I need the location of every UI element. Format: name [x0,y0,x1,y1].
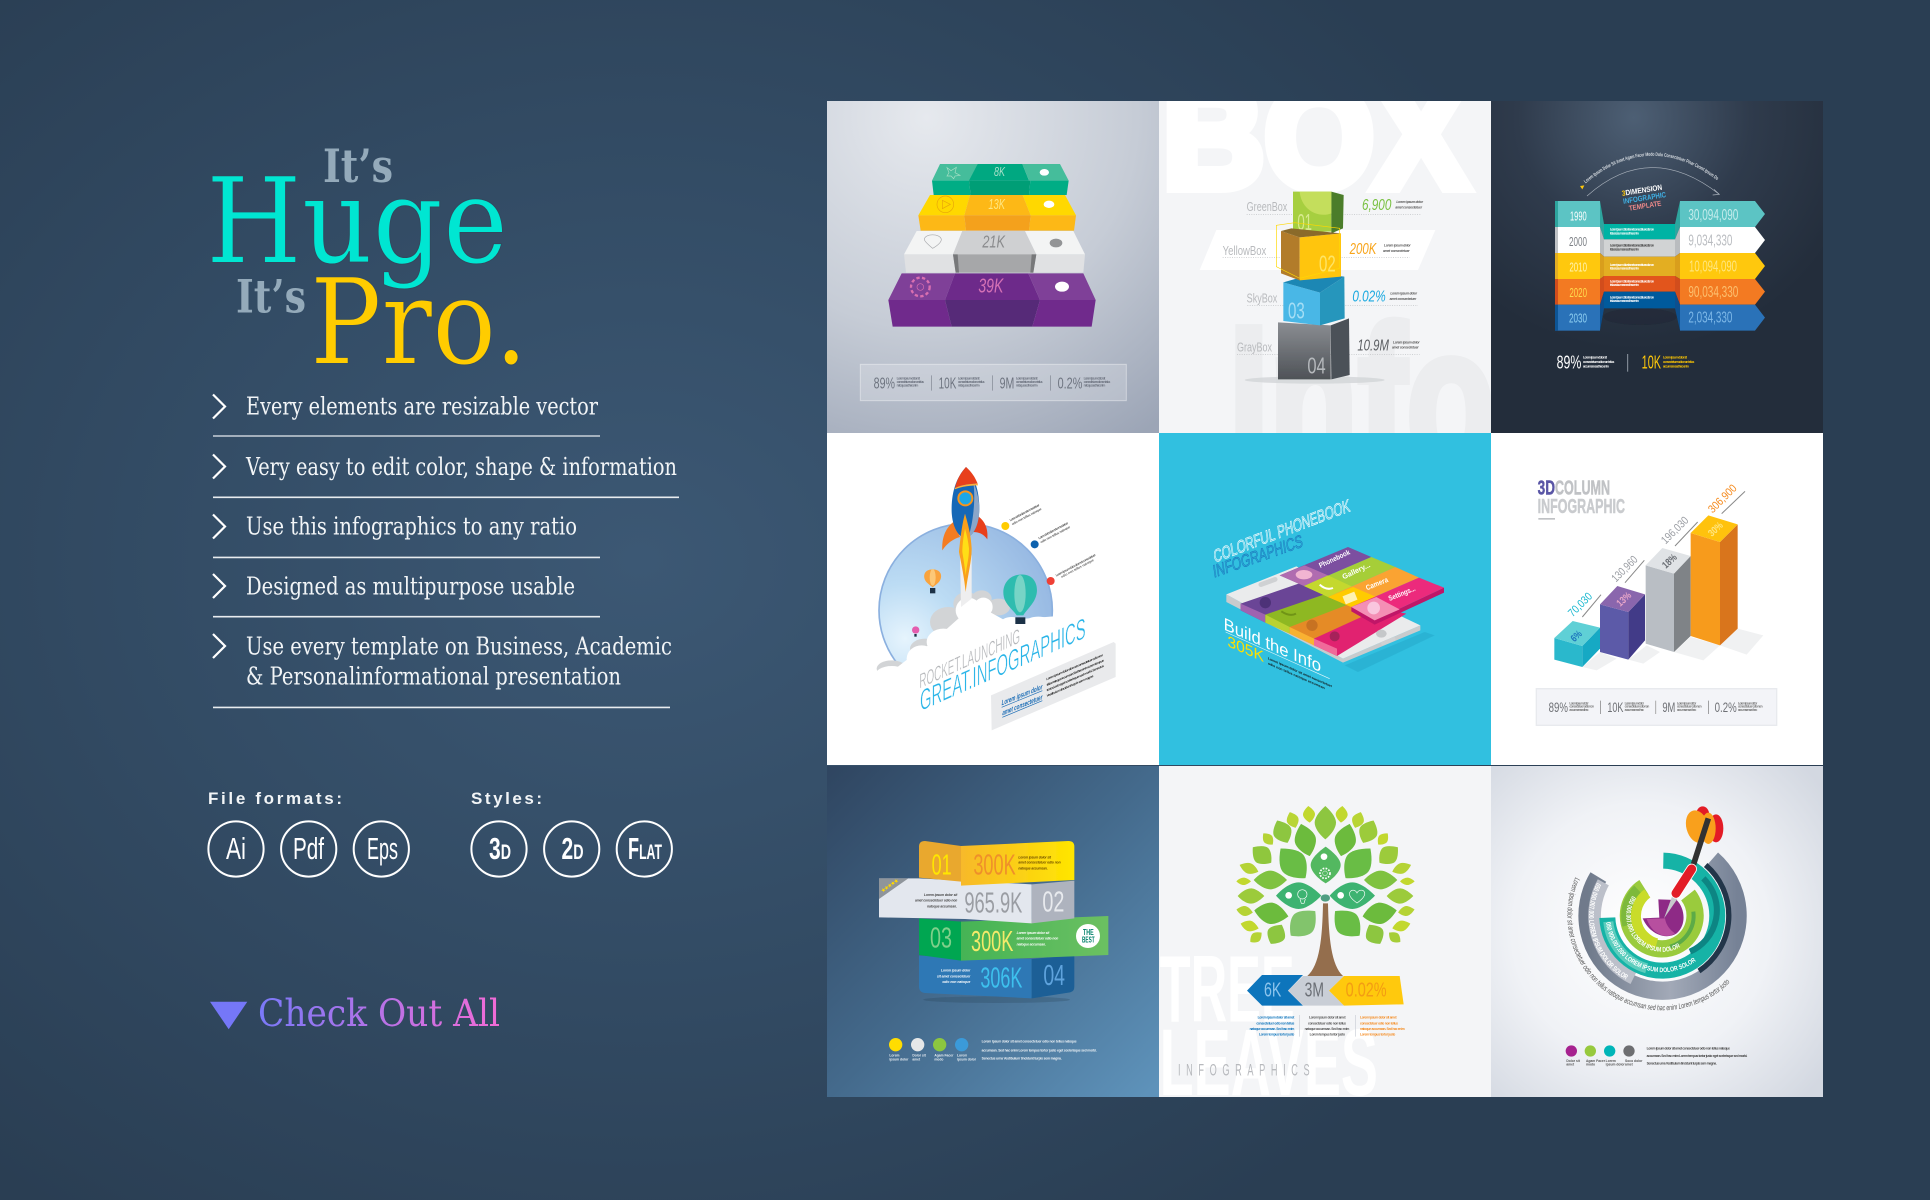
legend dots: modo [934,1058,943,1062]
legend dots: Dolor sit [912,1054,927,1058]
legend dots: Lorem [957,1054,967,1058]
badge: Ai [208,821,264,877]
stats bar: consectetuer odio non [1569,705,1594,709]
title arc: Lorem Ipsum Dolor Sit Amet Agam Facer Modo Dolo Consectetuer Pinar Ceomt Ipsum Dolor [1584,152,1718,184]
green box: 01 [1297,209,1312,235]
center title: INFOGRAPHIC [1622,190,1667,206]
list item 5: & Personalinformational presentation [246,662,621,690]
ribbon 01: 300K [973,849,1016,881]
legend dots: ipsum dolor [889,1058,909,1062]
box values: amet consectetuer [1395,205,1423,209]
box values: amet consectetuer [1390,297,1417,301]
yellow step [918,195,1076,231]
year column: 2020 [1569,286,1587,300]
list item 4: Designed as multipurpose usable [246,572,575,600]
ring: outer gray: 050 000.007.000 LOREM IPSUM DOLOR SOLOR [1589,883,1628,980]
white band [1200,230,1435,270]
list item 4 [213,572,600,617]
center strip: tellus accumsan sed hac enim [1610,247,1639,251]
captions: Lorem tempus tortor justo [1310,1033,1345,1037]
floating menu layer: Gallery... [1341,560,1372,581]
footer stats: accumsan sed hac enim [1583,364,1609,368]
shadow [1603,308,1677,325]
legend text [982,1040,1097,1061]
box values: Lorem ipsum dolor [1393,340,1420,344]
legend text: Senectus urna Vestibulum tincidunt turpis sem magna. [982,1057,1062,1061]
legend dots: amet [1625,1062,1634,1066]
badge: 2D: 2D [562,831,584,866]
box values: 6,900 [1362,197,1392,214]
captions: consectetuer odio non tellus [1308,1021,1346,1025]
stats bar: 89% [874,375,895,392]
yellow box: 02 [1319,251,1336,277]
box values: Lorem ipsum dolor [1390,292,1418,296]
phone shadow [1345,632,1435,672]
ribbon 01: natoque accumsan. [1018,867,1048,871]
ribbon 03: Lorem ipsum dolor sit [1017,931,1050,935]
feature leaves [1276,847,1375,909]
list item 1 [213,393,600,436]
captions: Lorem tempus tortor justo [1360,1033,1395,1037]
panel: rocket launching infographic [827,433,1159,765]
stats bar [1536,689,1777,725]
stats bar: consectetuer odio non tellus [1016,380,1043,384]
stats bar: Lorem ipsum dolor sit [897,376,921,380]
headline: build the info: Build the Info [1224,614,1321,676]
backdrop word: BOX: BOX [1163,55,1468,219]
white step: 21K [982,232,1006,252]
ribbon 01: amet consectetuer odio non [1018,861,1061,865]
center strip: tellus accumsan sed hac enim [1610,267,1639,271]
callout texts: Lorem dolor sit amet consectetuer [1038,521,1070,540]
ring: teal: 050 000.007.000 LOREM IPSUM DOLOR SOLOR [1606,922,1696,972]
legend text [1647,1046,1747,1065]
arrow labels: 0.02% [1346,979,1387,1002]
ribbon 02: amet consectetuer odio non [915,899,957,903]
styles [471,789,672,877]
callout texts: Lorem dolor sit amet consectetuer [1009,503,1041,522]
heading word: Huge: Huge [206,153,508,291]
year column: 1990 [1570,210,1587,224]
gray clouds [877,590,1010,677]
box values: amet consectetuer [1392,346,1419,350]
stats bar: consectetuer odio non tellus [1084,380,1110,384]
panel: tree leaves infographic [1159,766,1491,1116]
headline: build the info: 305K [1227,633,1264,666]
stats bar: natoque sed hac enim [897,384,918,388]
panel: rocket launching infographic: ROCKET.LAUNCHING [919,623,1020,693]
ribbon 03: THE [1083,927,1094,937]
rocket [942,467,988,607]
list item 1: Every elements are resizable vector [246,393,598,421]
stats bar: consectetuer odio non tellus [897,380,924,384]
column 3: gray [1646,548,1691,652]
list item 5 [213,633,672,707]
title: colorful phonebook: COLORFUL PHONEBOOK [1212,496,1351,567]
ribbon 04: sit amet consectetuer [937,974,971,978]
ribbon 03: 300K [971,926,1013,958]
box labels: GrayBox [1237,341,1272,355]
badge: Ai: Ai [226,831,246,866]
legend text: accumsan. Sed hac enim Lorem tempus tortor justo eget scelerisque sed morbi. [982,1048,1097,1052]
yellow step: 13K [988,197,1006,213]
callout texts: odio non tellus natoque [1040,525,1071,544]
ribbon 02: 965.9K [964,888,1022,920]
captions: Lorem ipsum dolor sit amet [1258,1015,1295,1019]
white step [904,231,1085,273]
legend dots [889,1038,977,1062]
footer stats: accumsan sed hac enim [1663,364,1689,368]
column 2: purple: 13% [1615,590,1634,609]
gray note panel [991,642,1116,730]
ribbon 04: Lorem ipsum dolor [941,969,971,973]
footer stats: Lorem ipsum dolor sit [1583,356,1608,360]
column 1: cyan: 6% [1569,629,1585,645]
floating menu layer [1280,547,1444,625]
panel: 3D column chart infographic [1491,433,1823,765]
badge: 3D: 3D [489,831,511,866]
stats bar: 10K [1607,699,1624,715]
panel: colorful phonebook infographic [1159,433,1491,765]
gray note panel: Vestibulum tincidunt turpis sem magna [1047,674,1093,698]
legend dots [1566,1045,1643,1066]
column 2: purple [1600,586,1645,660]
year column: 2010 [1569,260,1587,274]
stats bar: consectetuer odio non [1625,705,1649,709]
word: infographics: INFOGRAPHICS [1178,1061,1310,1079]
box values: amet consectetuer [1383,249,1410,253]
value arrows: 90,034,330 [1688,284,1738,301]
ring: teal [1599,852,1726,979]
dart [1664,806,1723,918]
center strip: tellus accumsan sed hac enim [1610,283,1639,287]
captions: Lorem ipsum dolor sit amet [1360,1015,1398,1019]
ribbon 03: BEST [1082,934,1095,944]
footer stats: consectetuer odio non tellus [1583,360,1614,364]
footer stats: Lorem ipsum dolor sit [1663,356,1688,360]
stats bar: 89% [1549,699,1568,715]
ribbon 03: amet consectetuer odio non [1017,937,1058,941]
stats bar: accumsan sed hac [1738,708,1757,712]
stats bar: Lorem ipsum dolor sit [958,376,981,380]
panel: stair blocks infographic [827,101,1159,433]
stats bar: 9M [1000,375,1014,392]
value arrows [1680,201,1765,331]
captions: natoque accumsan. Sed hac enim [1360,1027,1405,1031]
ribbon 02: 02 [1042,887,1064,919]
tree trunk [1307,903,1343,976]
chart title: INFOGRAPHIC [1538,495,1625,518]
box values [1349,197,1424,355]
stats bar: accumsan sed hac [1569,708,1589,712]
legend dots: Agam Facer [1586,1059,1606,1063]
stats bar: 9M [1662,699,1675,715]
value labels: 306,900 [1706,483,1740,516]
captions [1250,1015,1405,1037]
sky circle [879,524,1052,697]
chart title [1538,476,1625,520]
center strip [1600,201,1680,331]
stats bar: consectetuer odio non [1677,705,1702,709]
badge: Flat [617,821,672,877]
callout texts: Lorem ipsum dolor sit amet consectetuer [1055,553,1097,578]
ribbon 02: ★★★★★ [879,877,900,895]
stats bar: Lorem ipsum dolor sit [1084,376,1106,380]
floor shadow [1245,376,1385,384]
year column: 2030 [1569,312,1587,326]
center strip: Lorem ipsum dolor sit amet consectetuer odio non [1610,244,1654,248]
year column: 2000 [1569,235,1587,249]
value labels: 70,030 [1566,591,1595,619]
box values: Lorem ipsum dolor [1396,200,1424,204]
file formats [208,789,409,877]
chart title: COLUMN [1555,476,1610,499]
callout texts: odio non tellus natoque [1060,558,1095,579]
cta text: Check Out All [258,992,500,1035]
captions: Lorem ipsum dolor sit amet [1309,1015,1347,1019]
panel: dart target infographic [1491,766,1823,1097]
value arrows: 9,034,330 [1688,233,1732,250]
title: It's Huge It's Pro. [206,139,528,392]
gray note panel: tortor justo eget scelerisque sed morbi. Senectus [1047,664,1104,692]
gray note panel: Lorem ipsum dolor sit amet consectetuer odio non [1046,653,1103,681]
stats bar: natoque sed hac enim [1084,384,1105,388]
panel: dark timeline infographic [1491,101,1823,433]
center strip: Lorem ipsum dolor sit amet consectetuer odio non [1610,295,1654,299]
list item 5: Use every template on Business, Academic [246,633,672,661]
captions: consectetuer odio non tellus [1256,1021,1294,1025]
center strip: Lorem ipsum dolor sit amet consectetuer odio non [1610,228,1654,232]
title arc [1580,152,1720,196]
ring: outer gray [1578,852,1747,1000]
legend text: Senectus urna Vestibulum tincidunt turpis sem magna. [1647,1061,1717,1065]
stats bar: Lorem ipsum dolor [1677,701,1697,705]
column 1: cyan [1554,621,1600,667]
phone body [1226,566,1420,663]
arrow labels [1247,975,1404,1006]
headline: build the info: Lorem ipsum dolor sit amet consectetuer [1268,656,1333,689]
label: file formats: File formats: [208,789,342,808]
chart title: 3D [1538,476,1555,499]
box values: 200K [1349,241,1377,258]
stats bar: Lorem ipsum dolor sit [1016,376,1039,380]
badge: Eps [354,821,409,877]
green box [1293,192,1344,235]
stats bar [860,364,1126,401]
purple step [888,273,1096,327]
year column [1555,201,1600,331]
floating menu layer: Camera [1364,575,1390,592]
dotted guides [1223,214,1421,354]
heading word: It's: It’s [323,139,393,193]
ribbon 02: Lorem ipsum dolor sit [924,893,958,897]
box labels [1223,200,1288,355]
balloon: pink [912,626,919,637]
column shadows [1582,629,1763,670]
captions: consectetuer odio non tellus [1360,1021,1398,1025]
legend dots: amet [1566,1062,1575,1066]
panel: folded ribbon infographic [827,766,1159,1097]
gray note panel: Lorem ipsum dolor [1002,682,1043,707]
center strip: Lorem ipsum dolor sit amet consectetuer odio non [1610,263,1654,267]
column 4: orange [1691,515,1738,645]
legend text: accumsan. Sed hac enim Lorem tempus tortor justo eget scelerisque sed morbi. [1647,1054,1747,1058]
stats bar: 10K [939,375,957,392]
value arrows: 2,034,330 [1688,310,1732,327]
box labels: YellowBox [1223,244,1267,258]
stats bar: Lorem ipsum dolor [1569,701,1589,705]
headline: build the info: odio non tellus natoque accumsan [1268,661,1325,690]
ribbon shadow [923,996,1070,1003]
gray box [1278,318,1350,379]
legend dots: ipsum dolor [1606,1062,1625,1066]
stats bar: natoque sed hac enim [958,384,980,388]
backdrop word: TREE: TREE [1160,937,1295,1043]
green step [932,164,1069,195]
list item 2 [213,453,679,497]
badge: 3D [471,821,527,877]
legend dots: Agam Facer [934,1054,954,1058]
footer stats: consectetuer odio non tellus [1663,360,1694,364]
badge: Pdf: Pdf [293,831,324,866]
list item 2: Very easy to edit color, shape & information [245,453,677,481]
call to action: check out all [210,992,500,1035]
value labels: 196,030 [1659,515,1691,547]
ribbon 01: Lorem ipsum dolor sit [1018,855,1052,859]
callout texts: odio non tellus natoque [1011,507,1042,526]
stats bar: 0.2% [1715,699,1737,715]
legend dots: Lorem [1606,1059,1616,1063]
box values: 10.9M [1357,338,1389,355]
footer stats [1557,351,1694,372]
ribbon 01: 01 [932,849,952,881]
icon: down triangle [210,1002,247,1029]
column 4: orange: 30% [1706,520,1726,539]
callout dots [1001,522,1055,585]
legend text: Lorem Ipsum dolor sit amet consectetuer odio non tellus natoque [982,1040,1077,1044]
captions: Lorem tempus tortor justo [1259,1033,1294,1037]
captions: natoque accumsan. Sed hac enim [1250,1027,1294,1031]
center strip: tellus accumsan sed hac enim [1610,231,1639,235]
box values: 0.02% [1352,289,1386,306]
legend text: Lorem Ipsum dolor sit amet consectetuer odio non tellus natoque [1647,1046,1730,1050]
ring: green: 050 000.007.000 LOREM IPSUM DOLOR [1626,896,1680,952]
value arrows: 30,094,090 [1688,207,1738,224]
legend dots: ipsum dolor [957,1058,977,1062]
box values: Lorem ipsum dolor [1384,244,1411,248]
list item 3 [213,512,600,557]
stats bar: Lorem ipsum dolor [1625,701,1645,705]
footer stats: 10K [1642,351,1661,372]
legend dots: Lorem [889,1054,900,1058]
badge: Eps: Eps [367,831,398,866]
floating menu layer: Phonebook [1317,547,1352,570]
stats bar: Lorem ipsum dolor [1738,701,1758,705]
column 3: gray: 18% [1660,552,1680,571]
ribbon 01 [919,841,1074,886]
gray note panel: tellus natoque accumsan. Sed hac enim Lorem tempus [1047,658,1104,687]
ribbon 03: natoque accumsan. [1017,942,1046,946]
ring: green [1620,880,1704,958]
bullseye [1643,899,1684,936]
ribbon 04 [919,955,1074,998]
center title: TEMPLATE [1628,199,1662,213]
yellow box [1276,223,1341,280]
purple step: 39K [978,275,1004,297]
ribbon 04: odio non natoque [942,980,970,984]
sky box [1283,273,1345,325]
callout texts [1009,503,1097,579]
outer curved caption: Lorem ipsum dolor sit amet consectetuer odio non tellus natoque accumsan sed hac enim Lorem tempus tortor justo [1567,877,1730,1010]
ribbon 04: 306K [980,963,1022,995]
value labels [1566,483,1745,619]
ribbon 04: 04 [1043,960,1065,992]
value labels: 130,960 [1610,554,1641,585]
heading word: Pro.: Pro. [310,254,528,392]
legend dots: Soco dolor [1625,1059,1643,1063]
center title: 3DIMENSION [1621,183,1663,198]
center strip: Lorem ipsum dolor sit amet consectetuer odio non [1610,279,1654,283]
stats bar: consectetuer odio non tellus [958,380,985,384]
heading word: It's second: It’s [236,270,306,324]
gray box: 04 [1307,352,1326,378]
badge: 2D [544,821,599,877]
feature list [213,393,679,707]
white clouds [825,598,1159,766]
tree leaves [1236,806,1415,949]
ribbon 02: natoque accumsan. [927,905,957,909]
legend dots: modo [1586,1062,1595,1066]
center strip: tellus accumsan sed hac enim [1610,299,1639,303]
stats bar: accumsan sed hac [1625,708,1644,712]
ribbon 03: 03 [930,923,952,955]
legend dots: Dolor sit [1566,1059,1581,1063]
sky box: 03 [1288,297,1305,323]
balloon: teal [1003,574,1037,624]
box labels: SkyBox [1247,292,1278,306]
stats bar: accumsan sed hac [1677,708,1696,712]
stats bar: consectetuer odio non [1738,705,1763,709]
ribbon 03 [919,916,1108,961]
balloon: orange [924,569,941,593]
phone screen bands [1241,580,1406,656]
stats bar: natoque sed hac enim [1016,384,1038,388]
center title [1621,182,1668,213]
badge: Pdf [281,821,336,877]
box labels: GreenBox [1247,200,1288,214]
ribbon 02 [879,877,1074,923]
arrow labels: 6K [1264,979,1281,1002]
green step: 8K [994,165,1005,179]
list item 3: Use this infographics to any ratio [246,512,577,540]
value arrows: 10,094,090 [1689,258,1737,275]
gray note panel: amet consectetuer [1002,692,1043,717]
title: infographics: INFOGRAPHICS [1212,531,1304,582]
footer stats: 89% [1557,351,1581,372]
stats bar: 0.2% [1058,375,1083,392]
arrow labels: 3M [1305,979,1324,1002]
legend dots: amet [912,1058,921,1062]
panel: stacked boxes infographic [1159,55,1495,515]
floating menu layer: Settings... [1387,584,1417,603]
badge: Flat: FLAT [628,831,662,866]
label: styles: Styles: [471,789,542,808]
captions: natoque accumsan. Sed hac enim [1305,1027,1349,1031]
